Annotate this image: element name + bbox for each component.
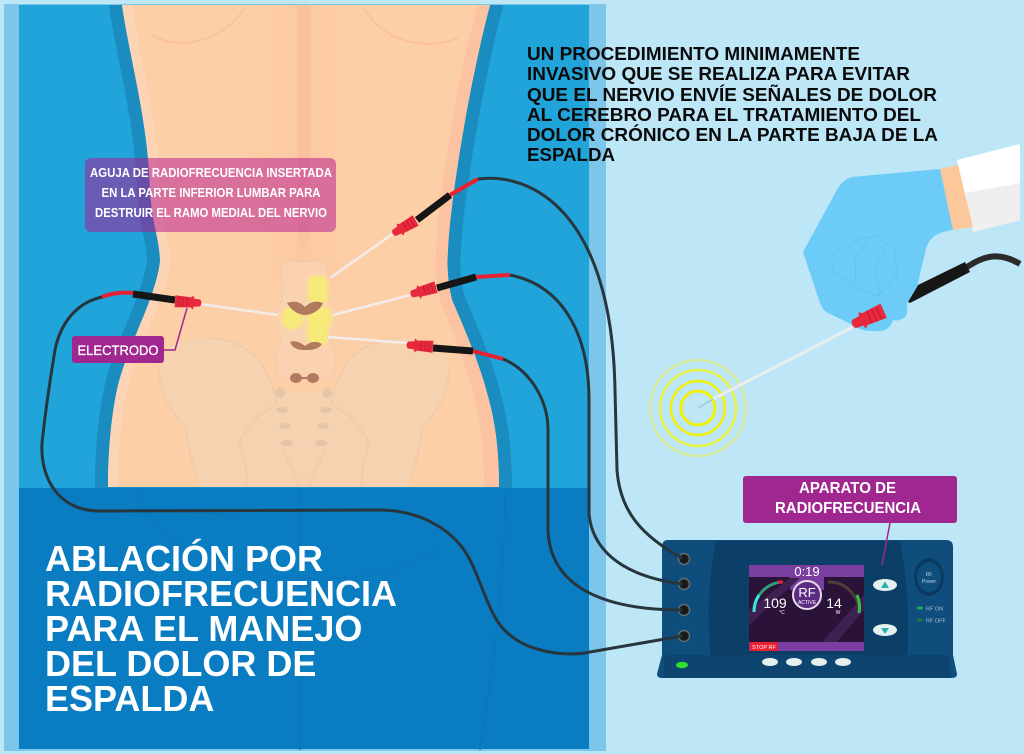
callout: device label: APARATO DE [799,480,896,497]
cable 2 to device [510,275,682,584]
device body [657,540,957,678]
RF active dial [793,581,821,609]
temperature gauge [754,582,783,612]
intervertebral discs [287,302,323,383]
status indicators: RF OFF [926,618,946,624]
title: DEL DOLOR DE [45,643,316,684]
screen: °C [779,610,785,616]
timer: 0:19 [794,564,820,579]
icon: radiofrequency rings [650,360,746,456]
icon: gloved hand holding electrode [698,144,1020,408]
panel: patient back illustration [4,4,606,751]
callout: needle description: EN LA PARTE INFERIOR LUMBAR PARA [102,185,321,200]
panel frame [4,4,606,751]
RF power button: RF [926,572,932,578]
screen: STOP RF [752,645,776,651]
description text: AL CEREBRO PARA EL TRATAMIENTO DEL [527,105,921,125]
glove [803,169,953,331]
electrode hub [849,302,887,333]
screen [749,564,864,651]
pelvic outlines [158,338,450,487]
lower panel: jeans [19,488,589,749]
blue backdrop [19,5,589,489]
screen: W [836,610,841,616]
radiofrequency device [657,540,957,678]
description text: QUE EL NERVIO ENVÍE SEÑALES DE DOLOR [527,84,937,105]
title: RADIOFRECUENCIA [45,573,397,614]
callout: needle description: DESTRUIR EL RAMO MEDIAL DEL NERVIO [95,205,327,220]
screen: 109 [763,595,787,611]
jeans seams [140,490,505,750]
finger creases [832,236,897,296]
title: ESPALDA [45,678,214,719]
center console [709,541,908,678]
cable 3 to device [503,359,682,610]
arrow buttons [873,579,897,636]
electrode: top [389,179,478,240]
title: PARA EL MANEJO [45,608,362,649]
title [45,537,397,719]
callout: device label [743,476,957,565]
power led [676,662,688,668]
stop button [750,642,778,651]
wrist [940,165,973,230]
torso [100,5,510,487]
description text: DOLOR CRÓNICO EN LA PARTE BAJA DE LA [527,124,938,145]
RF power button: Power [922,579,936,585]
callout: electrode label [72,308,187,363]
callout: device label: RADIOFRECUENCIA [775,500,921,517]
power gauge [828,582,859,613]
callout: needle description [85,158,336,232]
RF power button [914,558,944,596]
description text: ESPALDA [527,145,615,165]
screen: ACTIVE [798,600,817,606]
screen: RF [798,585,816,600]
status indicators [917,606,946,624]
electrode: lower right [406,338,503,359]
status indicators: RF ON [926,606,943,612]
description text: UN PROCEDIMIENTO MINIMAMENTE [527,44,860,64]
soft keys [762,658,851,666]
sleeve [957,144,1020,232]
cable 4 to device [42,297,682,654]
callout: electrode label: ELECTRODO [78,342,159,358]
cable 1 to device [478,178,682,558]
pelvis and spine [158,262,450,487]
connection jacks [678,554,690,642]
description text: INVASIVO QUE SE REALIZA PARA EVITAR [527,64,910,84]
description text [527,44,938,165]
handle [908,262,970,303]
sacral foramina [275,388,332,446]
pelvic bones [158,338,450,487]
callout: needle description: AGUJA DE RADIOFRECUENCIA INSERTADA [90,165,333,180]
electrode: middle right [409,275,510,301]
needle [713,327,853,399]
title: ABLACIÓN POR [45,537,323,579]
foot strip [664,655,950,678]
vertebrae [275,262,336,378]
yellow nerve glow [282,276,332,346]
screen: 14 [826,595,842,611]
electrode: left [102,293,202,310]
cable [967,256,1020,267]
needles [200,233,410,343]
